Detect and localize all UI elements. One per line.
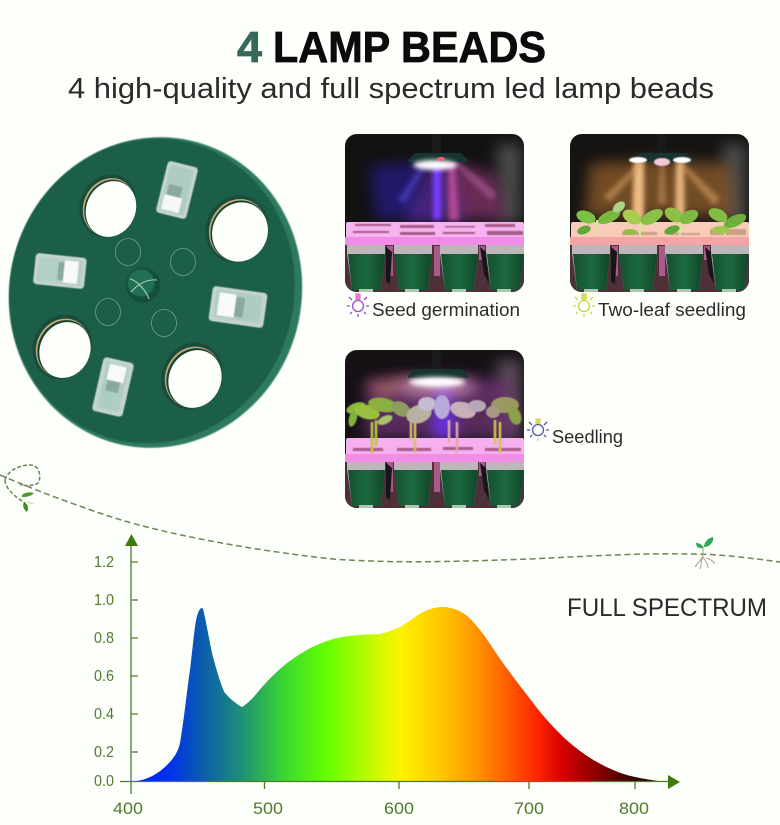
- y axis labels: 0.6: [94, 668, 114, 685]
- photo: seed germination: [345, 134, 524, 292]
- x axis labels: 700: [514, 799, 544, 818]
- tray: [345, 438, 524, 462]
- y axis labels: 0.4: [94, 706, 114, 723]
- x axis labels: 600: [384, 799, 414, 818]
- y axis labels: 1.0: [94, 592, 114, 609]
- y axis labels: 1.2: [94, 554, 114, 571]
- axes: [120, 540, 668, 794]
- spectrum curve: [131, 607, 663, 782]
- icon: purple bulb: [347, 294, 369, 317]
- title words: LAMP BEADS: [273, 23, 546, 72]
- icon: sprout with roots: [695, 537, 715, 569]
- LED bead: bottom: [92, 357, 134, 417]
- x axis labels: [113, 799, 649, 818]
- y axis labels: 0.8: [94, 630, 114, 647]
- LED bead: left: [33, 253, 86, 289]
- hole: bottom left: [22, 305, 102, 389]
- x axis labels: 400: [113, 799, 143, 818]
- y axis labels: 0.2: [94, 744, 114, 761]
- growth path dashed line: [0, 475, 780, 562]
- hole: bottom right: [150, 333, 234, 419]
- y axis labels: 0.0: [94, 773, 114, 790]
- heading: full spectrum: FULL SPECTRUM: [567, 594, 767, 622]
- plant one: [345, 396, 413, 453]
- caption: seedling: [527, 419, 623, 447]
- subtitle: 4 high-quality and full spectrum led lamp beads: [68, 73, 714, 105]
- title numeral: 4: [237, 23, 263, 72]
- tray: [570, 222, 749, 245]
- x axis labels: 800: [619, 799, 649, 818]
- photo: seedling: [345, 350, 524, 508]
- label text: Seed germination: [372, 300, 520, 320]
- chart: spectrum: [94, 534, 680, 818]
- icon: yellow bulb: [573, 294, 595, 317]
- tray: [345, 222, 524, 245]
- screw holes: [96, 238, 196, 336]
- LED bead: right: [209, 286, 267, 328]
- caption: two-leaf seedling: [573, 294, 746, 320]
- seedling plants: [345, 395, 524, 453]
- light rays: [365, 374, 515, 438]
- light rays: [370, 160, 505, 222]
- lamp bead disc: [0, 104, 337, 481]
- title: [237, 23, 546, 72]
- y axis arrow: [125, 534, 138, 546]
- icon: indigo bulb: [527, 419, 549, 441]
- center knob: [126, 268, 160, 302]
- plant four: [486, 397, 524, 453]
- plant two: [404, 397, 436, 453]
- hole: top right: [195, 185, 279, 273]
- caption: seed germination: [347, 294, 520, 320]
- photo: two-leaf seedling: [570, 134, 749, 292]
- label text: Two-leaf seedling: [598, 300, 746, 320]
- icon: leaf sprig loop: [5, 465, 40, 512]
- label text: Seedling: [552, 427, 623, 447]
- y axis labels: [94, 554, 114, 790]
- hole: top left: [69, 165, 147, 247]
- light rays: [585, 160, 735, 220]
- seedlings: [575, 199, 748, 236]
- disc face: [0, 106, 329, 476]
- plant three: [434, 395, 486, 453]
- disc rim: [0, 104, 337, 481]
- x axis arrow: [668, 775, 680, 789]
- x axis labels: 500: [253, 799, 283, 818]
- LED bead: top: [156, 161, 198, 219]
